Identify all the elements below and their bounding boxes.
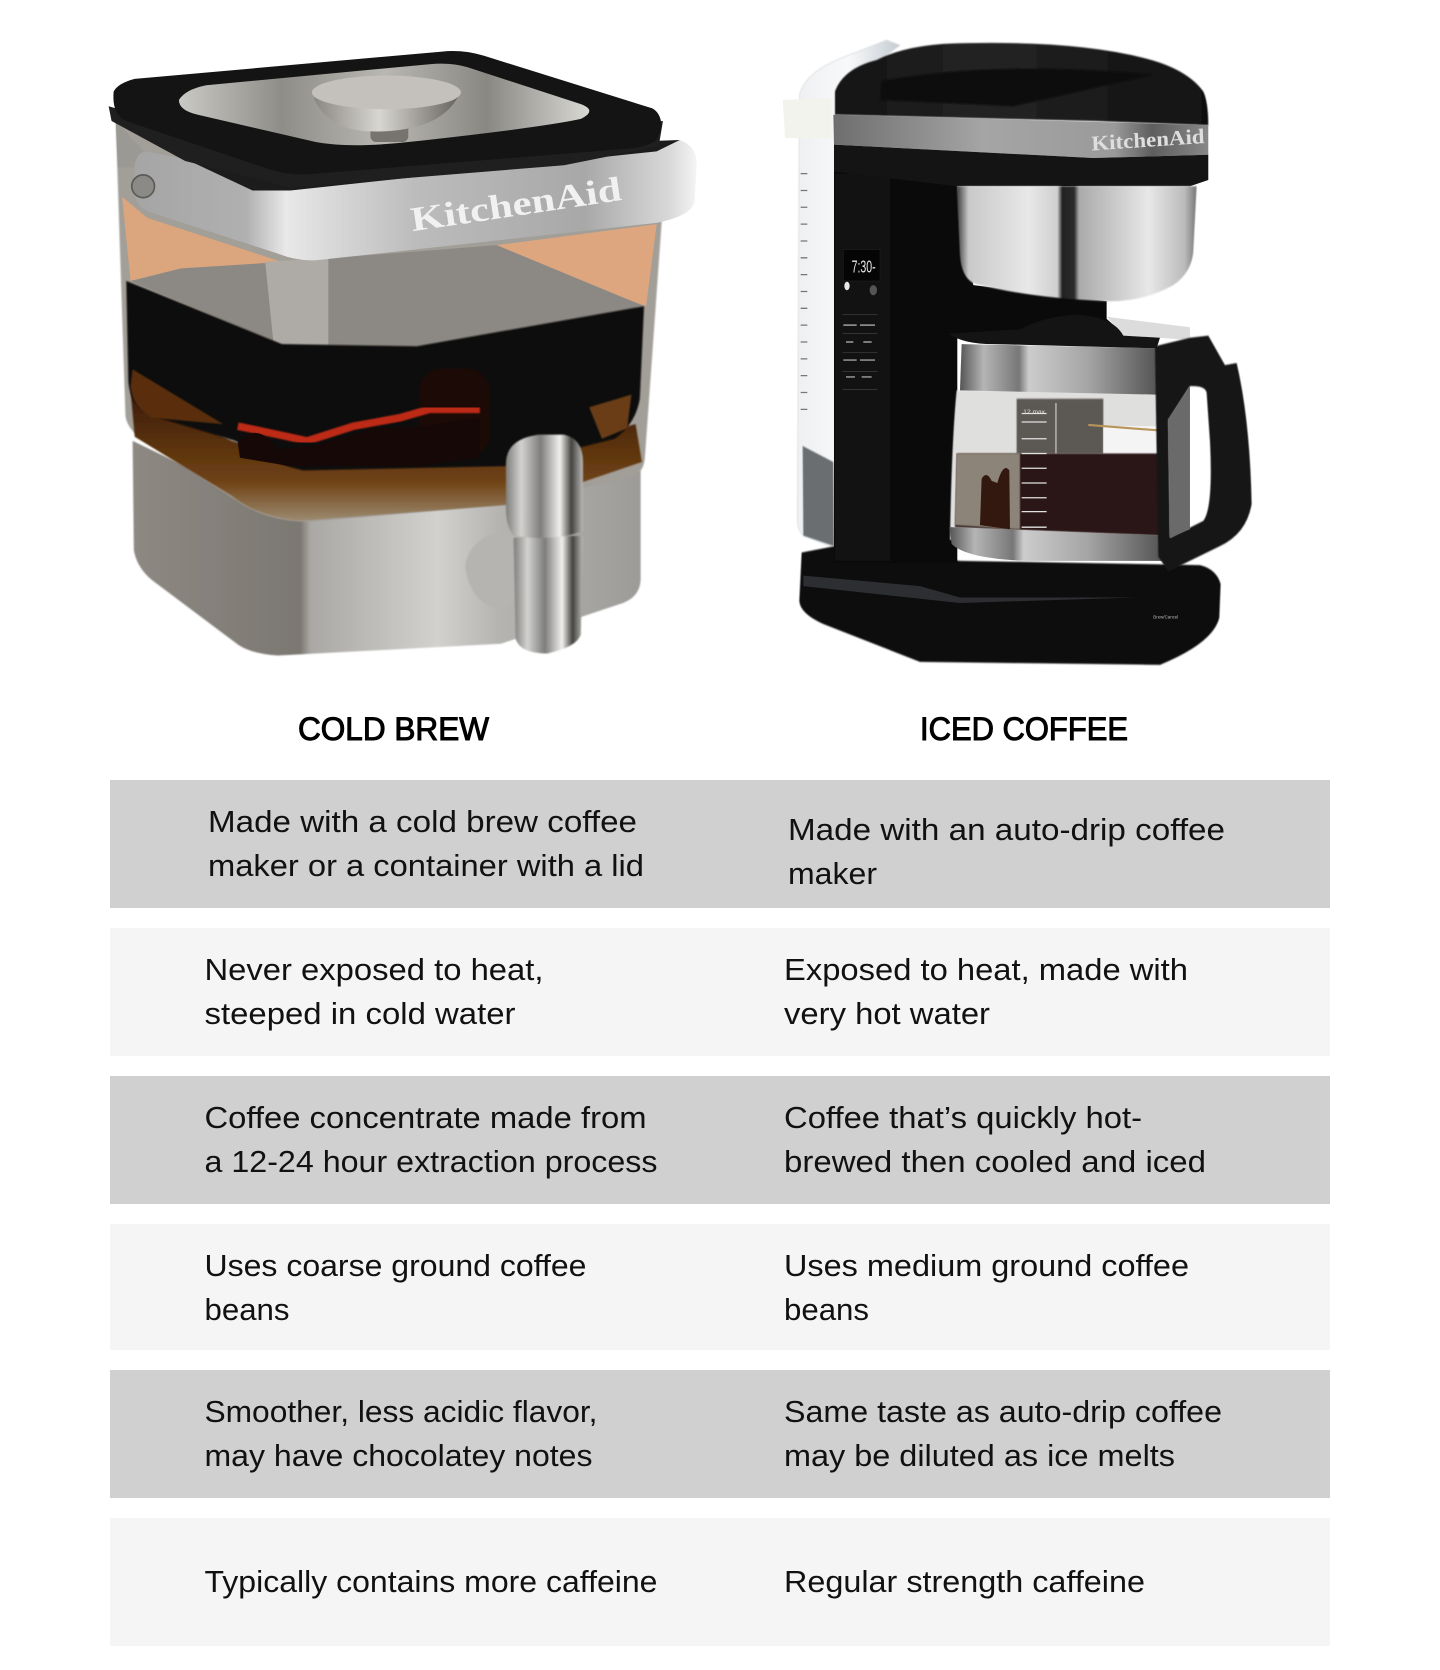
tank water <box>803 446 834 546</box>
cold brew process text <box>204 1100 658 1179</box>
cold brew heat text: steeped in cold water <box>204 996 516 1031</box>
amber tint, left <box>122 197 282 344</box>
row 3: process <box>110 1076 1330 1204</box>
panel indicator lights <box>844 282 877 295</box>
brew basket <box>957 186 1197 301</box>
steel band <box>833 115 1208 158</box>
cold brew process text: Coffee concentrate made from <box>204 1100 646 1135</box>
water tank <box>797 40 900 548</box>
glass white reflection <box>1103 426 1158 454</box>
cold brew grind text: Uses coarse ground coffee <box>204 1248 586 1283</box>
carafe amber line <box>1088 425 1158 430</box>
light reflection on basket <box>265 258 328 346</box>
carafe handle <box>1155 336 1252 571</box>
iced coffee heat text <box>784 952 1188 1031</box>
glass carafe <box>116 121 662 522</box>
cold brew heat text: Never exposed to heat, <box>204 952 544 987</box>
carafe neck shadow <box>948 186 1123 334</box>
carafe measuring marks <box>1022 403 1056 527</box>
red streak <box>238 409 480 441</box>
left glass light <box>955 454 1020 529</box>
clock readout: 7:30- <box>852 258 876 277</box>
handle gray glass <box>1168 386 1190 538</box>
carafe lid back <box>1107 317 1190 340</box>
cold brew equipment text <box>208 804 644 883</box>
reflection figure <box>980 468 1010 529</box>
iced coffee flavor text: Same taste as auto-drip coffee <box>784 1394 1222 1429</box>
iced coffee equipment text: Made with an auto-drip coffee <box>788 812 1225 847</box>
KitchenAid logo: KitchenAid <box>1091 125 1206 156</box>
cold brew process text: a 12-24 hour extraction process <box>204 1144 658 1179</box>
iced coffee process text: Coffee that’s quickly hot- <box>784 1100 1142 1135</box>
carafe glass <box>950 390 1165 540</box>
spout cap <box>506 435 583 538</box>
carafe bottom ring <box>949 527 1162 561</box>
cold brew equipment text: maker or a container with a lid <box>208 848 644 883</box>
Brew/Cancel label: Brew/Cancel <box>1153 614 1178 620</box>
product image: cold brew maker <box>109 51 697 656</box>
knob top <box>312 76 461 109</box>
knob stem <box>370 121 408 142</box>
iced coffee heat text: very hot water <box>784 996 990 1031</box>
filter basket reflection <box>131 245 644 346</box>
spout arm <box>465 529 526 609</box>
row 1: equipment <box>110 780 1330 908</box>
iced coffee process text <box>784 1100 1206 1179</box>
spout <box>465 435 583 653</box>
column heading: iced coffee: ICED COFFEE <box>920 711 1128 747</box>
lid knob <box>312 76 461 142</box>
row 6: caffeine <box>110 1518 1330 1646</box>
warm glow, right <box>589 395 631 439</box>
spout lower body <box>514 536 583 653</box>
iced coffee caffeine text: Regular strength caffeine <box>784 1564 1145 1599</box>
amber coffee bed <box>131 390 642 521</box>
dark coffee <box>126 281 644 470</box>
iced coffee flavor text <box>784 1394 1222 1473</box>
row 4: grind <box>110 1224 1330 1350</box>
dark grounds mound <box>238 418 480 466</box>
cold brew caffeine text: Typically contains more caffeine <box>204 1564 658 1599</box>
knob cup <box>314 94 460 132</box>
inner tube window <box>419 369 490 457</box>
steel rim, left <box>116 121 143 167</box>
iced coffee equipment text <box>788 812 1225 891</box>
base highlight <box>803 576 1137 603</box>
control panel <box>835 174 890 561</box>
tank gauge ticks <box>801 174 807 409</box>
cold brew flavor text <box>204 1394 598 1473</box>
cold brew equipment text: Made with a cold brew coffee <box>208 804 637 839</box>
iced coffee process text: brewed then cooled and iced <box>784 1144 1206 1179</box>
amber tint, right <box>497 224 657 306</box>
lower lid gasket <box>109 106 663 188</box>
base <box>799 546 1221 665</box>
carafe lid <box>948 315 1160 348</box>
steel band <box>134 140 697 260</box>
cold brew grind text: beans <box>204 1292 290 1327</box>
cold brew flavor text: may have chocolatey notes <box>204 1438 592 1473</box>
iced coffee heat text: Exposed to heat, made with <box>784 952 1188 987</box>
lid <box>835 43 1208 125</box>
carafe steel collar <box>960 344 1157 395</box>
product image: drip coffee maker <box>783 40 1252 665</box>
panel buttons <box>843 315 877 390</box>
row 2: heat <box>110 928 1330 1056</box>
iced coffee grind text: beans <box>784 1292 869 1327</box>
cold brew heat text <box>204 952 544 1031</box>
control column <box>834 169 957 563</box>
iced coffee grind text: Uses medium ground coffee <box>784 1248 1189 1283</box>
brewed coffee <box>955 454 1160 536</box>
panel display <box>843 249 880 281</box>
lid recess <box>880 69 1153 106</box>
column heading: cold brew: COLD BREW <box>298 711 490 747</box>
black band <box>834 145 1208 186</box>
warm glow, left <box>131 369 223 424</box>
max label: 12 max <box>1023 409 1045 416</box>
KitchenAid logo: KitchenAid <box>408 170 624 239</box>
band rivet <box>132 175 154 198</box>
black lid <box>113 51 661 174</box>
steel lid insert <box>179 64 589 145</box>
iced coffee equipment text: maker <box>788 856 877 891</box>
iced coffee flavor text: may be diluted as ice melts <box>784 1438 1175 1473</box>
steel base <box>133 441 641 656</box>
cold brew grind text <box>204 1248 586 1327</box>
cold brew flavor text: Smoother, less acidic flavor, <box>204 1394 598 1429</box>
band inner shadow <box>185 140 680 190</box>
row 5: flavor <box>110 1370 1330 1498</box>
tank handle <box>783 98 832 139</box>
iced coffee grind text <box>784 1248 1189 1327</box>
glass dark reflection <box>1017 399 1103 454</box>
